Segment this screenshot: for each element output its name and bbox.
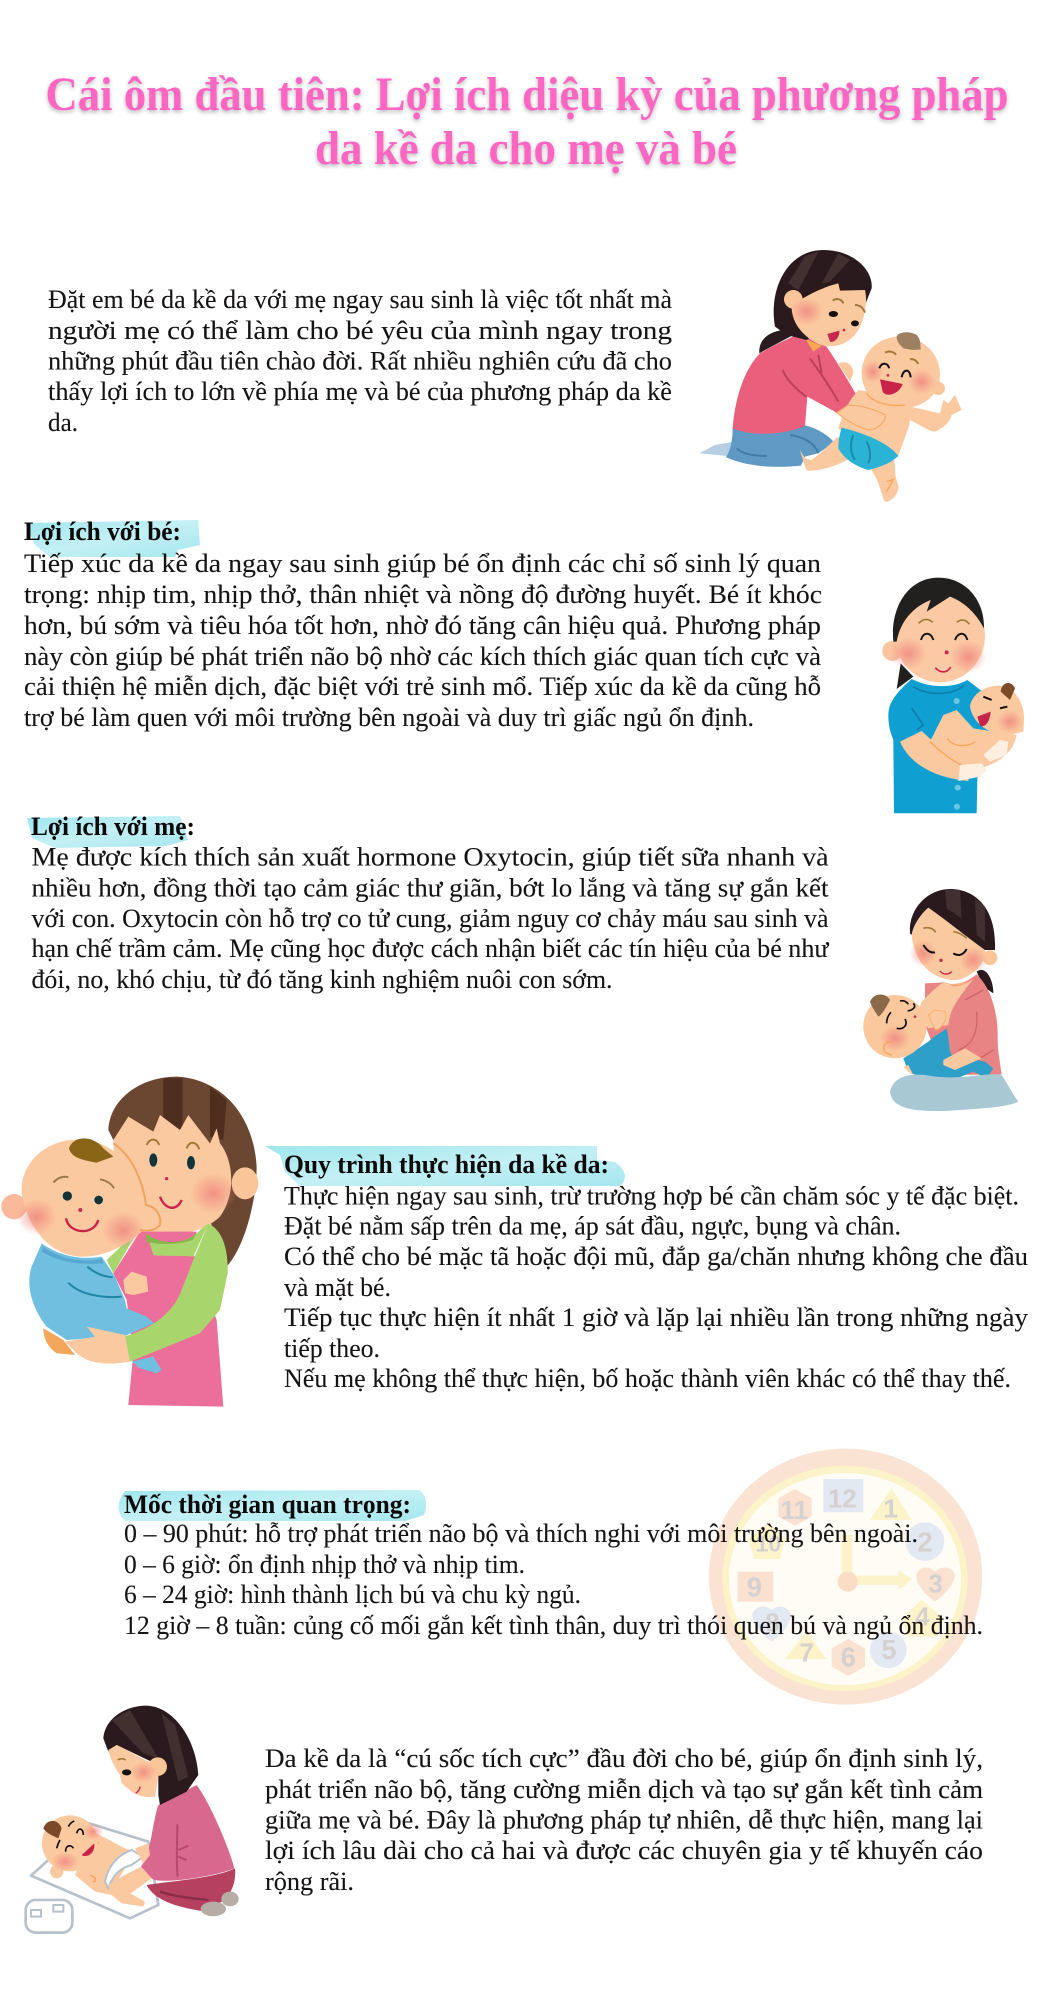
- illustration: clock: 11: [781, 1495, 808, 1525]
- illustration: clock: [709, 1449, 982, 1705]
- text: time milestones: 6 – 24 giờ: hình thành lịch bú và chu kỳ ngủ.: [124, 1579, 581, 1609]
- intro paragraph: thấy lợi ích to lớn về phía mẹ và bé của phương pháp da kề: [48, 376, 672, 406]
- text: benefits for baby: trợ bé làm quen với môi trường bên ngoài và duy trì giấc ngủ ổn định.: [24, 702, 754, 732]
- text: procedure: [284, 1180, 1029, 1393]
- intro paragraph: Đặt em bé da kề da với mẹ ngay sau sinh là việc tốt nhất mà: [48, 284, 672, 314]
- illustration: clock: 1: [883, 1494, 898, 1524]
- intro paragraph: [48, 284, 672, 437]
- intro paragraph: những phút đầu tiên chào đời. Rất nhiều nghiên cứu đã cho: [48, 346, 672, 376]
- text: procedure: Có thể cho bé mặc tã hoặc đội mũ, đắp ga/chăn nhưng không che đầu: [284, 1241, 1028, 1271]
- title: [46, 68, 1008, 175]
- text: procedure: Tiếp tục thực hiện ít nhất 1 giờ và lặp lại nhiều lần trong những ngày: [284, 1302, 1029, 1332]
- illustration: mother breastfeeding: [863, 889, 1018, 1111]
- closing paragraph: giữa mẹ và bé. Đây là phương pháp tự nhiên, dễ thực hiện, mang lại: [265, 1804, 983, 1834]
- title: da kề da cho mẹ và bé: [315, 122, 737, 175]
- text: time milestones: 0 – 90 phút: hỗ trợ phát triển não bộ và thích nghi với môi trường bên ngoài.: [124, 1518, 918, 1548]
- illustration: mother holding baby in blue shirt: [882, 578, 1024, 813]
- text: procedure: Thực hiện ngay sau sinh, trừ trường hợp bé cần chăm sóc y tế đặc biệt.: [284, 1180, 1019, 1210]
- heading: benefits for baby: [24, 516, 200, 557]
- text: benefits for mother: với con. Oxytocin còn hỗ trợ co tử cung, giảm nguy cơ chảy máu sau sinh và: [32, 903, 829, 933]
- heading: benefits for mother: Lợi ích với mẹ:: [31, 811, 195, 841]
- title: Cái ôm đầu tiên: Lợi ích diệu kỳ của phương pháp: [46, 68, 1008, 121]
- illustration: clock: 7: [799, 1638, 814, 1668]
- heading: important time milestones: Mốc thời gian quan trọng:: [124, 1489, 411, 1519]
- illustration: clock: 6: [841, 1642, 856, 1673]
- text: benefits for baby: cải thiện hệ miễn dịch, đặc biệt với trẻ sinh mổ. Tiếp xúc da kề da cũng hỗ: [24, 671, 821, 701]
- closing paragraph: rộng rãi.: [265, 1866, 354, 1896]
- text: benefits for mother: hạn chế trầm cảm. Mẹ cũng học được cách nhận biết các tín hiệu của bé như: [32, 933, 830, 963]
- illustration: clock: 9: [747, 1572, 762, 1603]
- closing paragraph: Da kề da là “cú sốc tích cực” đầu đời cho bé, giúp ổn định sinh lý,: [265, 1743, 983, 1773]
- text: benefits for mother: đói, no, khó chịu, từ đó tăng kinh nghiệm nuôi con sớm.: [32, 964, 612, 994]
- illustration: clock: 5: [881, 1634, 897, 1665]
- text: benefits for baby: hơn, bú sớm và tiêu hóa tốt hơn, nhờ đó tăng cân hiệu quả. Phương pháp: [24, 610, 821, 640]
- illustration: mother hugging baby: [1, 1077, 258, 1407]
- text: procedure: Nếu mẹ không thể thực hiện, bố hoặc thành viên khác có thể thay thế.: [284, 1363, 1011, 1393]
- text: benefits for baby: [24, 548, 822, 732]
- closing paragraph: [265, 1743, 983, 1896]
- illustration: clock: 8: [765, 1608, 780, 1638]
- heading: benefits for baby: Lợi ích với bé:: [24, 516, 181, 546]
- text: procedure: Đặt bé nằm sấp trên da mẹ, áp sát đầu, ngực, bụng và chân.: [284, 1210, 901, 1240]
- intro paragraph: người mẹ có thể làm cho bé yêu của mình ngay trong: [48, 315, 672, 345]
- text: benefits for baby: Tiếp xúc da kề da ngay sau sinh giúp bé ổn định các chỉ số sinh lý quan: [24, 548, 821, 578]
- text: procedure: tiếp theo.: [284, 1333, 380, 1363]
- text: benefits for mother: [32, 842, 830, 994]
- illustration: clock: 12: [828, 1484, 857, 1514]
- closing paragraph: lợi ích lâu dài cho cả hai và được các chuyên gia y tế khuyến cáo: [265, 1835, 983, 1865]
- illustration: clock: 3: [928, 1568, 943, 1598]
- illustration: mother massaging baby: [699, 250, 962, 502]
- text: benefits for baby: trọng: nhịp tim, nhịp thở, thân nhiệt và nồng độ đường huyết. Bé ít khóc: [24, 579, 822, 609]
- intro paragraph: da.: [48, 407, 78, 437]
- text: procedure: và mặt bé.: [284, 1272, 391, 1302]
- text: benefits for mother: nhiều hơn, đồng thời tạo cảm giác thư giãn, bớt lo lắng và tăng sự gắn kết: [32, 872, 829, 902]
- closing paragraph: phát triển não bộ, tăng cường miễn dịch và tạo sự gắn kết tình cảm: [265, 1774, 983, 1804]
- heading: procedure: Quy trình thực hiện da kề da:: [284, 1149, 609, 1179]
- illustration: mother changing diaper: [26, 1706, 239, 1933]
- text: time milestones: 0 – 6 giờ: ổn định nhịp thở và nhịp tim.: [124, 1549, 525, 1579]
- illustration: clock: 4: [915, 1602, 930, 1632]
- illustration: clock: 2: [917, 1527, 933, 1558]
- text: time milestones: [124, 1518, 983, 1640]
- text: benefits for mother: Mẹ được kích thích sản xuất hormone Oxytocin, giúp tiết sữa nhanh và: [32, 842, 829, 872]
- illustration: clock: 10: [755, 1531, 781, 1557]
- text: time milestones: 12 giờ – 8 tuần: củng cố mối gắn kết tình thân, duy trì thói quen bú và ngủ ổn định.: [124, 1610, 983, 1640]
- text: benefits for baby: này còn giúp bé phát triển não bộ nhờ các kích thích giác quan tích cực và: [24, 641, 821, 671]
